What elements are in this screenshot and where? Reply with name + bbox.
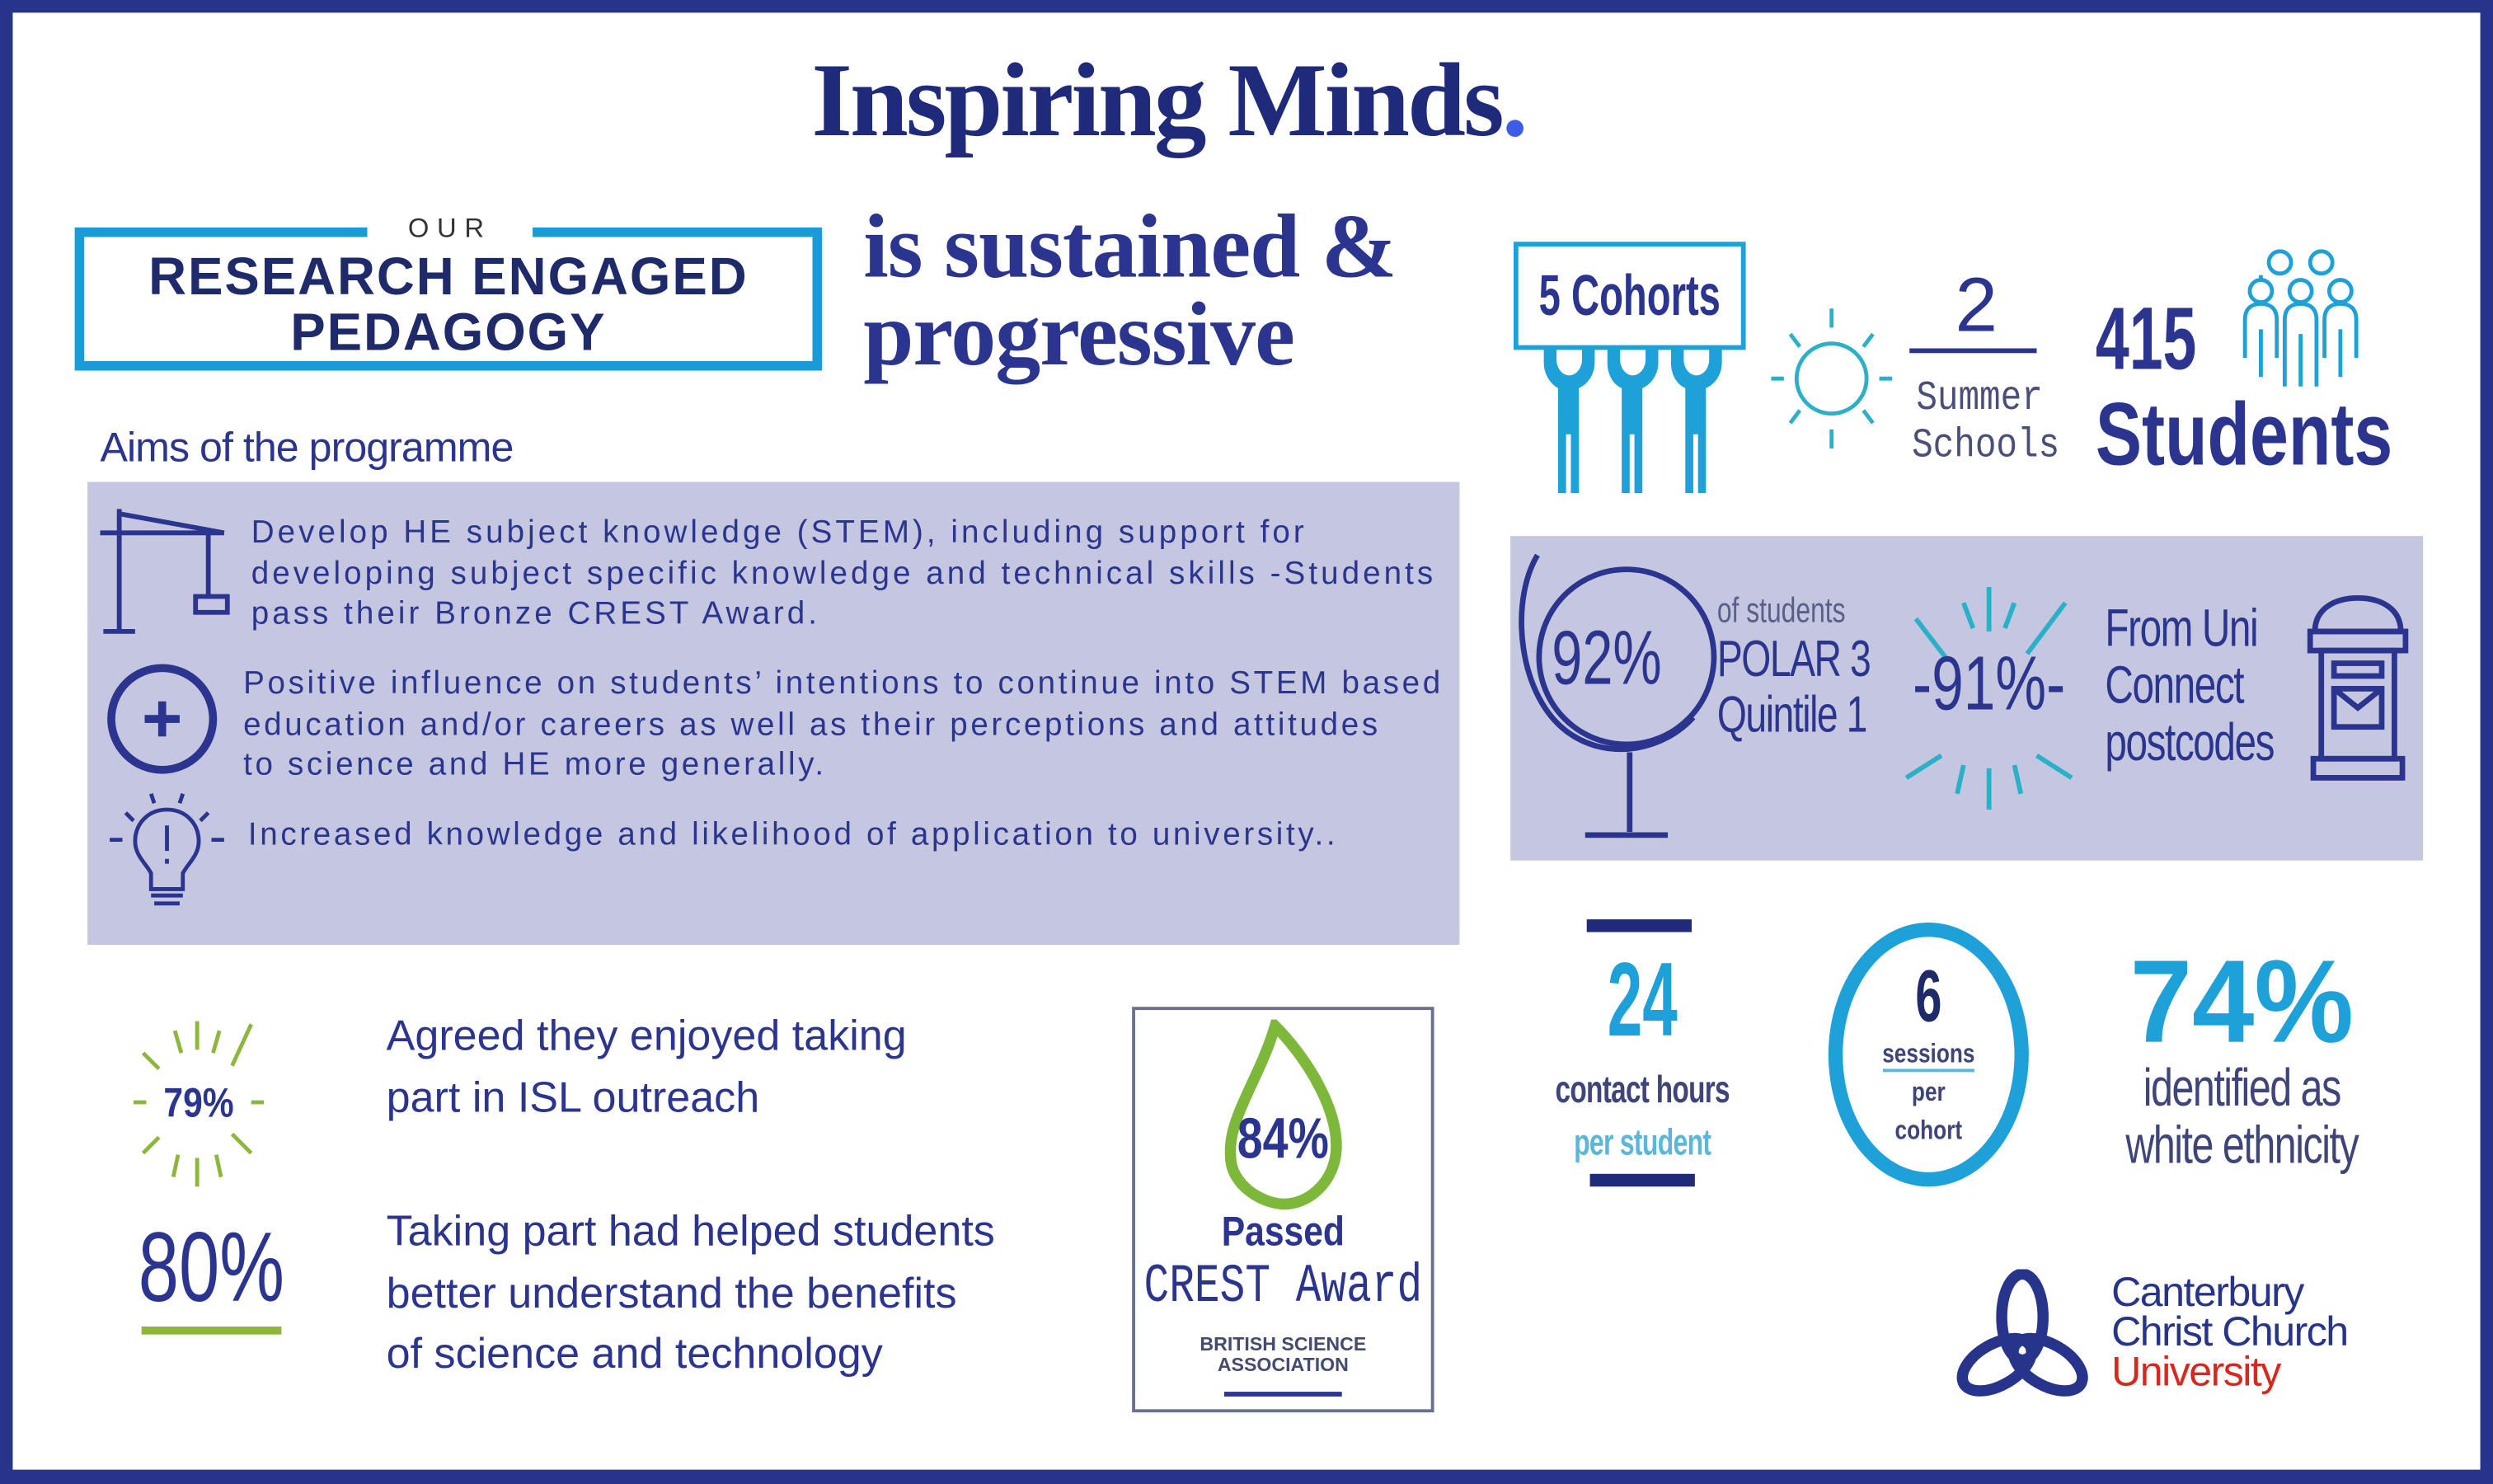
- text: benefits: better understand the benefits: [387, 1269, 957, 1316]
- subheading serif: [863, 197, 1396, 385]
- value 79%: 79%: [163, 1078, 234, 1126]
- stat: 80%: [138, 1214, 284, 1335]
- subheading serif: is sustained &: [863, 197, 1396, 298]
- text: aim 1: developing subject specific knowledge and technical skills -Students: [251, 556, 1436, 591]
- stat: 2 summer schools: [1909, 264, 2059, 469]
- icon: green burst: [134, 1021, 264, 1187]
- label: white ethnicity: [2125, 1115, 2358, 1174]
- green underline: [142, 1327, 281, 1335]
- sign: 5 Cohorts: [1539, 262, 1721, 327]
- card: CREST award: [1132, 1007, 1434, 1412]
- heading box: research engaged pedagogy: [75, 228, 822, 371]
- panel: demographics: [1510, 536, 2423, 861]
- text: aim 1: [251, 515, 1436, 632]
- stat: 6 sessions circle: [1829, 923, 2029, 1186]
- text: aim 2: education and/or careers as well as their perceptions and attitudes: [243, 707, 1381, 742]
- icon: post box: [2307, 595, 2409, 781]
- icon: trefoil: [1957, 1270, 2088, 1397]
- label uni connect: Connect: [2105, 655, 2243, 714]
- icon: plus circle: [107, 665, 218, 774]
- panel: aims: [87, 482, 1459, 945]
- icon: burst 91%: [1904, 587, 2073, 810]
- value 6: 6: [1915, 955, 1941, 1037]
- label: [2125, 1058, 2359, 1174]
- OUR label: [367, 214, 533, 245]
- heading text: RESEARCH ENGAGED: [148, 247, 749, 305]
- icon: sun: [1771, 308, 1892, 448]
- label: [1912, 373, 2059, 469]
- text: enjoyed: [386, 1012, 907, 1121]
- stat: 24 contact hours: [1556, 919, 1730, 1187]
- OUR label: OUR: [408, 214, 492, 243]
- value 91%: -91%-: [1913, 642, 2065, 727]
- label POLAR: Quintile 1: [1717, 686, 1866, 743]
- icon: people holding sign: [1543, 350, 1722, 493]
- text: enjoyed: part in ISL outreach: [387, 1073, 759, 1120]
- logo text: [2111, 1268, 2348, 1395]
- logo text: Christ Church: [2111, 1308, 2348, 1355]
- value 74%: 74%: [2130, 935, 2354, 1068]
- label sessions per cohort: [1882, 1039, 1974, 1145]
- stat: 74% white ethnicity: [2125, 935, 2359, 1174]
- value 92%: 92%: [1552, 618, 1662, 702]
- label students: Students: [2096, 383, 2392, 483]
- title: Inspiring Minds.: [811, 43, 1526, 159]
- value 80%: 80%: [138, 1214, 284, 1323]
- value 2: 2: [1955, 264, 1998, 349]
- icon: green loop: [1225, 1019, 1342, 1210]
- label: Schools: [1912, 421, 2059, 469]
- subheading serif: progressive: [863, 284, 1294, 385]
- heading text: PEDAGOGY: [290, 303, 606, 361]
- text: benefits: Taking part had helped students: [387, 1207, 995, 1255]
- label sessions per cohort: sessions: [1882, 1039, 1974, 1068]
- stat: 5 cohorts: [1514, 242, 1746, 493]
- text: benefits: [387, 1207, 995, 1378]
- label: Summer: [1916, 373, 2043, 421]
- text: aim 2: [243, 666, 1444, 782]
- label uni connect: From Uni: [2105, 598, 2257, 657]
- label POLAR: of students: [1717, 590, 1846, 630]
- label sessions per cohort: per: [1912, 1077, 1946, 1107]
- icon: globe: [1519, 554, 1716, 838]
- icon: crowd: [2242, 249, 2359, 387]
- text: aim 3: Increased knowledge and likelihood of application to university..: [248, 818, 1338, 852]
- stat: 24 contact hours: per student: [1574, 1121, 1711, 1162]
- text: aim 2: to science and HE more generally.: [243, 748, 827, 782]
- label BSA: [1200, 1333, 1366, 1376]
- label CREST award: CREST Award: [1144, 1258, 1422, 1318]
- logo text: Canterbury: [2111, 1268, 2303, 1315]
- text: benefits: of science and technology: [387, 1330, 883, 1378]
- value 415: 415: [2096, 288, 2196, 388]
- aims heading: Aims of the programme: [100, 423, 513, 471]
- label: contact hours: [1556, 1068, 1730, 1112]
- value 84%: 84%: [1237, 1106, 1329, 1171]
- stat: 415 students: [2096, 288, 2392, 483]
- text: aim 1: pass their Bronze CREST Award.: [251, 596, 820, 632]
- text: enjoyed: Agreed they enjoyed taking: [387, 1012, 907, 1059]
- value 24: 24: [1608, 940, 1678, 1058]
- sign: [1514, 242, 1746, 350]
- label POLAR: POLAR 3: [1717, 630, 1870, 687]
- label: identified as: [2143, 1058, 2340, 1116]
- label sessions per cohort: cohort: [1895, 1115, 1962, 1145]
- icon: crane: [101, 509, 230, 634]
- heading text: [148, 247, 749, 361]
- label BSA: ASSOCIATION: [1218, 1354, 1349, 1376]
- label BSA: BRITISH SCIENCE: [1200, 1333, 1366, 1355]
- text: aim 1: Develop HE subject knowledge (STEM), including support for: [251, 515, 1308, 551]
- label uni connect: postcodes: [2105, 712, 2274, 772]
- label uni connect: [2105, 598, 2274, 772]
- label POLAR: [1717, 590, 1870, 743]
- icon: light bulb: [110, 793, 224, 905]
- label passed: Passed: [1222, 1207, 1345, 1255]
- logo text: University: [2111, 1347, 2280, 1395]
- text: aim 2: Positive influence on students’ intentions to continue into STEM based: [243, 666, 1444, 702]
- logo: Canterbury Christ Church University: [1957, 1268, 2348, 1397]
- stat: 79% enjoyed: [134, 1021, 264, 1187]
